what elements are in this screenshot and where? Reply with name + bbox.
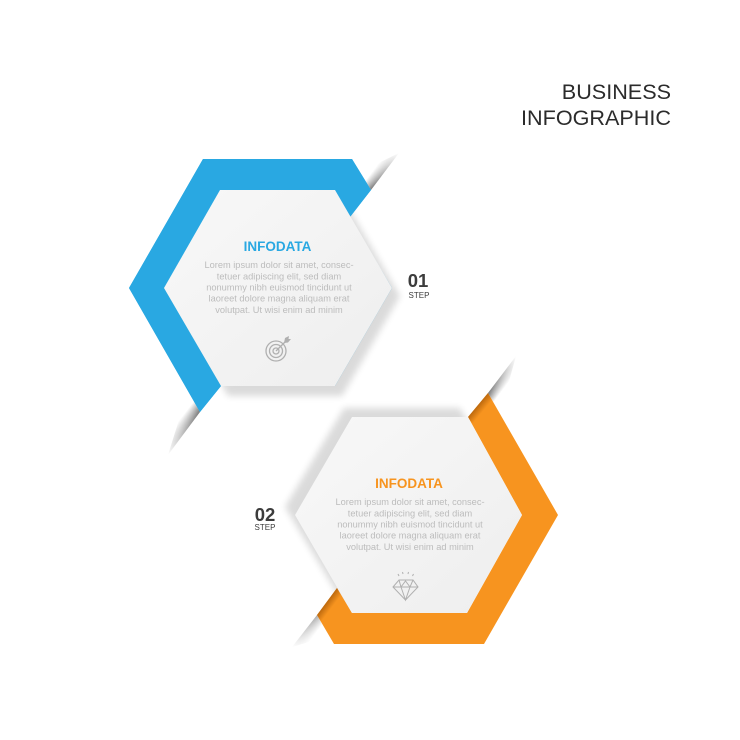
title: BUSINESS [562, 79, 671, 104]
icon: target [266, 336, 291, 361]
body text: volutpat. Ut wisi enim ad minim [346, 542, 474, 552]
white hexagon card [295, 417, 522, 613]
step label 01 [408, 270, 429, 300]
step label 01: 01 [408, 270, 428, 291]
body text: volutpat. Ut wisi enim ad minim [215, 305, 343, 315]
panel: step 02 [255, 356, 558, 647]
body text: tetuer adipiscing elit, sed diam [217, 272, 342, 282]
step label 02: STEP [255, 523, 275, 532]
icon: diamond [393, 572, 418, 600]
body text: laoreet dolore magna aliquam erat [209, 294, 350, 304]
fold shadow: orange bottom left [295, 615, 322, 644]
heading: INFODATA [244, 239, 312, 254]
title: INFOGRAPHIC [521, 105, 671, 130]
orange hexagon band [317, 393, 558, 644]
title [521, 79, 671, 130]
fold shadow: orange top right [488, 358, 515, 402]
white hexagon card [164, 190, 392, 386]
card shadow [285, 408, 512, 605]
body text: Lorem ipsum dolor sit amet, consec- [204, 260, 354, 270]
card shadow [172, 198, 400, 396]
step label 02: 02 [255, 504, 275, 525]
body text [204, 260, 354, 315]
fold shadow: blue bottom left [170, 402, 200, 452]
heading: INFODATA [375, 476, 443, 491]
step label 01: STEP [409, 291, 429, 300]
body text: nonummy nibh euismod tincidunt ut [337, 520, 483, 530]
fold shadow: blue top right [366, 155, 397, 190]
body text: tetuer adipiscing elit, sed diam [348, 508, 473, 518]
repaint blue band above shadow [129, 159, 371, 412]
body text [335, 497, 485, 552]
body text: Lorem ipsum dolor sit amet, consec- [335, 497, 485, 507]
body text: laoreet dolore magna aliquam erat [340, 530, 481, 540]
body text: nonummy nibh euismod tincidunt ut [206, 282, 352, 292]
blue hexagon band [129, 159, 392, 412]
panel: step 01 [129, 153, 429, 455]
